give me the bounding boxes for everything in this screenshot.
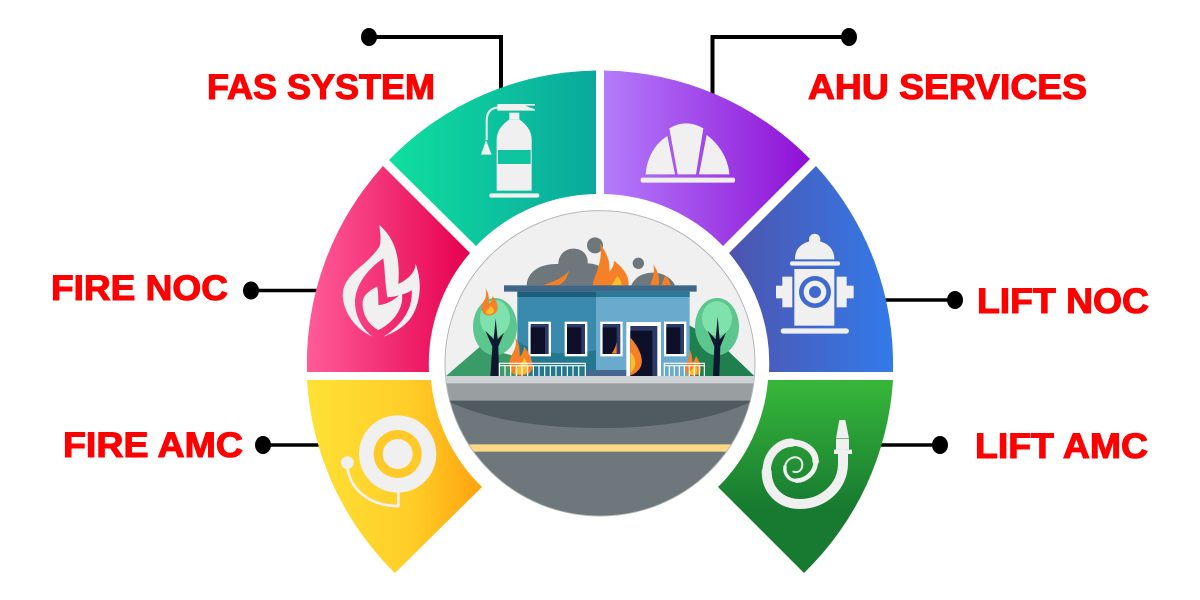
connector: FIRE AMC [255,436,322,454]
segment: pink [307,166,470,372]
connector: FIRE NOC [243,282,320,300]
icon: hydrant [776,234,854,334]
road [446,376,754,516]
tree left [473,298,517,376]
door [626,322,661,376]
label: FAS SYSTEM: FAS SYSTEM [207,68,435,107]
central illustration [430,211,770,521]
building [504,285,697,376]
connector: LIFT AMC [878,436,948,454]
label: LIFT AMC: LIFT AMC [975,427,1148,466]
segment: teal [389,70,596,246]
tree right [695,298,739,376]
segment: blue [729,166,893,372]
connector: FAS SYSTEM [361,28,501,90]
label: FIRE NOC: FIRE NOC [51,269,228,308]
icon: fire extinguisher [481,104,539,198]
flame right [685,349,701,376]
icon: flame [343,225,420,337]
icon: fire hose [767,420,852,504]
segment: purple [604,70,810,246]
icon: helmet [641,123,735,183]
connector: LIFT NOC [882,291,963,309]
connector: AHU SERVICES [712,28,857,94]
windows [528,322,686,356]
flame left [509,337,533,375]
fence left [499,363,585,376]
fence right [664,363,704,376]
segment: green [718,380,893,573]
icon: alarm bell [341,415,436,506]
label: AHU SERVICES: AHU SERVICES [808,68,1087,107]
flame on tree [482,289,498,316]
segment: yellow [307,380,482,573]
label: FIRE AMC: FIRE AMC [63,426,243,465]
label: LIFT NOC: LIFT NOC [977,282,1149,321]
roof flames [543,243,671,285]
hills [446,324,755,377]
smoke [527,237,675,285]
